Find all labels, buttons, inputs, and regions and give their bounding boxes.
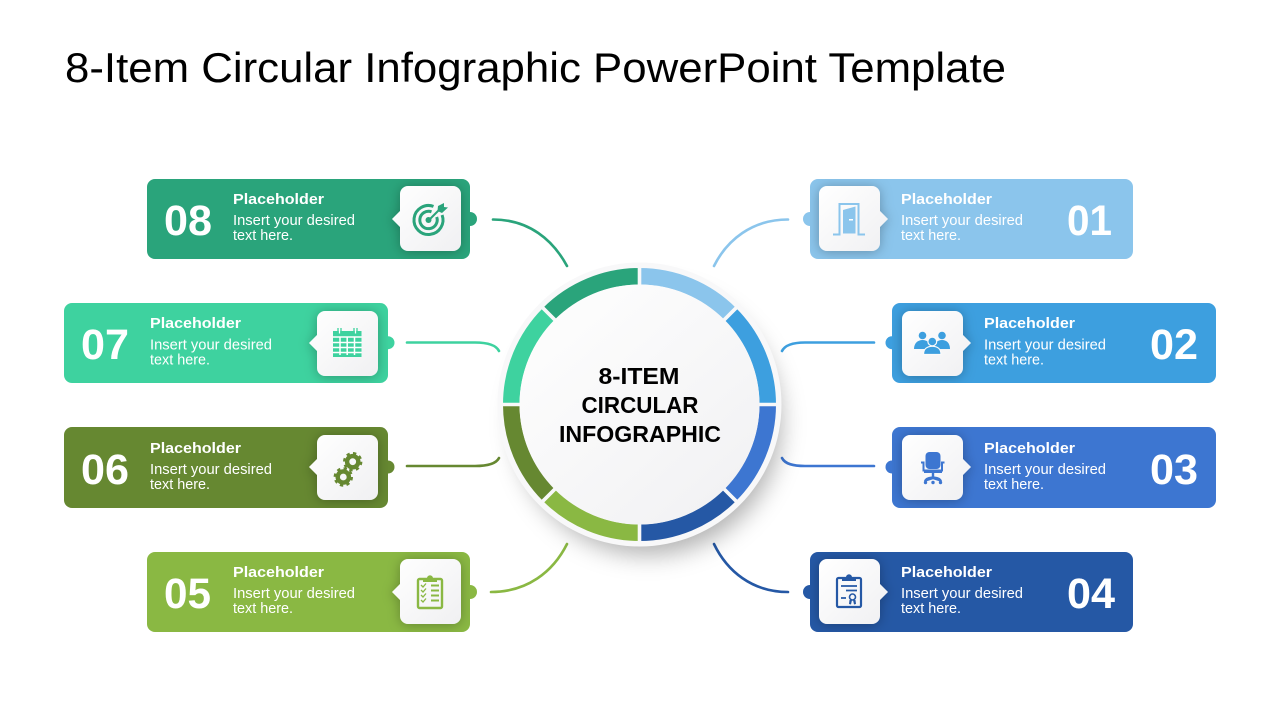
connector: 04 — [714, 544, 788, 592]
text: 02: text here. — [984, 352, 1044, 368]
text: 04 — [901, 564, 1023, 617]
card 05 — [147, 552, 477, 632]
number 07: 07 — [81, 321, 129, 369]
number 05: 05 — [164, 570, 211, 618]
text: 07 — [150, 315, 272, 368]
number 06: 06 — [81, 446, 129, 494]
text: 01: Placeholder — [901, 191, 992, 208]
ring segment 06 — [503, 404, 555, 501]
center text: INFOGRAPHIC — [559, 421, 721, 447]
text: 02: Insert your desired — [984, 336, 1106, 354]
icon tile: target — [392, 186, 461, 251]
card 02 — [886, 303, 1216, 383]
text: 08: Insert your desired — [233, 212, 355, 229]
icon tile: people — [902, 311, 971, 376]
text: 06: Insert your desired — [150, 461, 272, 478]
text: 04: text here. — [901, 600, 961, 617]
icon tile: calendar — [309, 311, 378, 376]
card 03 — [886, 427, 1216, 508]
text: 05: Insert your desired — [233, 585, 355, 602]
card 08 — [147, 179, 477, 259]
text: 04: Placeholder — [901, 564, 992, 581]
connector: 06 — [407, 458, 499, 466]
icon tile: clipboard certificate — [819, 559, 888, 624]
number 02: 02 — [1150, 321, 1198, 369]
text: 01: text here. — [901, 227, 961, 244]
text: 05: text here. — [233, 600, 293, 617]
text: 08: text here. — [233, 227, 293, 244]
text: 01: Insert your desired — [901, 212, 1023, 229]
ring segment 03 — [724, 404, 776, 501]
text: 03: Insert your desired — [984, 461, 1106, 478]
connector: 02 — [782, 342, 874, 351]
inner disc — [520, 284, 760, 524]
text: 06: Placeholder — [150, 440, 241, 457]
number 01: 01 — [1067, 197, 1112, 245]
center text: 8-ITEM — [598, 363, 680, 389]
text: 07: text here. — [150, 352, 210, 368]
icon tile: clipboard checklist — [392, 559, 461, 624]
text: 02: Placeholder — [984, 315, 1075, 332]
text: 06 — [150, 440, 272, 493]
ring segment 02 — [724, 308, 776, 404]
text: 04: Insert your desired — [901, 585, 1023, 602]
text: 06: text here. — [150, 476, 210, 493]
icon tile: gears — [309, 435, 378, 500]
ring segment 08 — [543, 268, 640, 320]
connector: 07 — [407, 342, 499, 351]
outer disc — [498, 262, 782, 546]
number 04: 04 — [1067, 570, 1115, 618]
text: 08: Placeholder — [233, 191, 324, 208]
center text — [559, 363, 721, 447]
connector: 05 — [491, 544, 567, 592]
central circle — [498, 262, 782, 555]
text: 03 — [984, 440, 1106, 493]
text: 05: Placeholder — [233, 564, 324, 581]
text: 03: Placeholder — [984, 440, 1075, 457]
text: 07: Insert your desired — [150, 336, 272, 354]
text: 07: Placeholder — [150, 315, 241, 332]
ring segment 01 — [640, 268, 736, 320]
card 06 — [64, 427, 394, 508]
connector: 01 — [714, 220, 788, 266]
ring segment 04 — [640, 489, 736, 541]
text: 08 — [233, 191, 355, 244]
ring segment 07 — [503, 308, 555, 404]
center text: CIRCULAR — [582, 392, 699, 418]
text: 02 — [984, 315, 1106, 368]
ring segment 05 — [543, 489, 640, 541]
connector: 03 — [782, 458, 874, 466]
title: 8-Item Circular Infographic PowerPoint Template — [65, 44, 1006, 91]
icon tile: door — [819, 186, 888, 251]
number 03: 03 — [1150, 446, 1198, 494]
text: 01 — [901, 191, 1023, 244]
card 01 — [803, 179, 1133, 259]
connector: 08 — [493, 220, 567, 266]
card 07 — [64, 303, 394, 383]
card 04 — [803, 552, 1133, 632]
text: 05 — [233, 564, 355, 617]
text: 03: text here. — [984, 476, 1044, 493]
number 08: 08 — [164, 197, 212, 245]
icon tile: chair — [902, 435, 971, 500]
